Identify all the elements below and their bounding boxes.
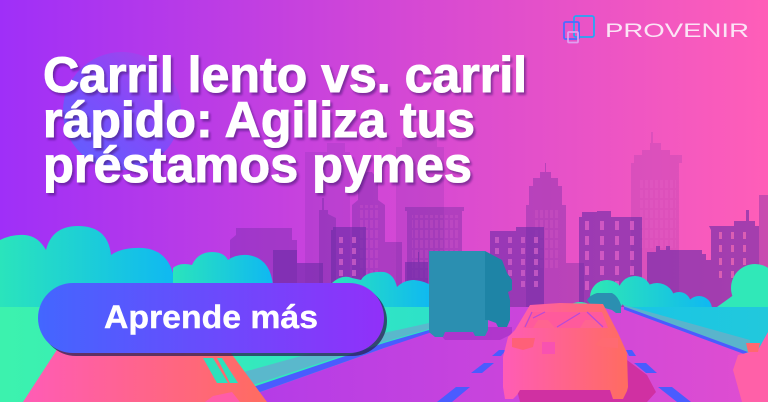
truck side: [485, 251, 512, 327]
button label: Aprende más: [104, 299, 318, 335]
car body: [733, 332, 768, 402]
skyline far towers: [305, 132, 682, 310]
taillight left: [512, 338, 535, 350]
car window lines: [525, 312, 603, 327]
trees beside truck: [332, 272, 432, 307]
road shoulder right: [624, 305, 750, 356]
title: préstamos pymes: [43, 137, 472, 193]
left foreground car: [23, 345, 267, 402]
logo icon: [564, 16, 594, 42]
road surface: [232, 307, 768, 402]
title: [43, 47, 527, 193]
big tree on right: [717, 264, 768, 312]
decorative disc behind title: [63, 52, 181, 170]
skyline tower windows: [360, 180, 676, 300]
title: Carril lento vs. carril: [43, 47, 527, 103]
car windshield stripes: [203, 358, 238, 383]
truck rear: [429, 251, 488, 337]
road shoulder left: [240, 307, 490, 386]
call to action button: [38, 283, 387, 356]
logo wordmark: PROVENIR: [605, 20, 749, 42]
car window: [523, 312, 608, 328]
far right trees: [569, 276, 712, 322]
truck shadow: [434, 327, 512, 340]
button shadow: [41, 286, 387, 356]
middle trees: [173, 252, 273, 307]
car hood highlight: [205, 392, 240, 402]
car seats: [533, 320, 602, 328]
taillight right: [595, 338, 618, 348]
right field: [618, 307, 768, 362]
car body: [503, 303, 628, 399]
center car: [503, 303, 628, 399]
road edge line right: [624, 306, 748, 354]
skyline windows: [336, 221, 755, 296]
button pill: [38, 283, 384, 353]
lane dashes: [437, 350, 691, 402]
car roof: [23, 345, 267, 402]
skyline front buildings: [273, 210, 759, 307]
far teal car: [587, 293, 621, 313]
center car shadow: [517, 360, 656, 402]
logo: [564, 16, 749, 42]
left trees: [0, 226, 175, 307]
road edge line left: [250, 330, 432, 392]
title: rápido: Agiliza tus: [43, 92, 475, 148]
truck: [429, 251, 512, 337]
skyline mid buildings: [230, 163, 768, 307]
license plate: [542, 342, 555, 354]
mirror: [746, 343, 760, 352]
left green field: [0, 307, 500, 402]
right edge car: [733, 332, 768, 402]
